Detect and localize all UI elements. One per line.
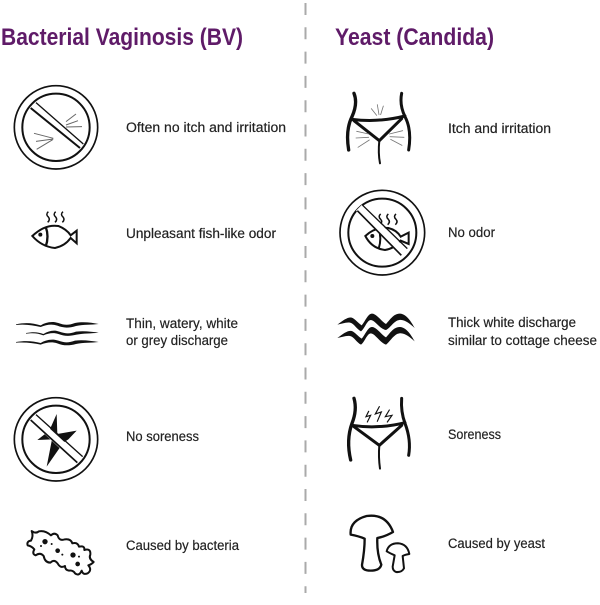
text: thin discharge: or grey discharge (126, 333, 228, 348)
icon: soreness body (349, 398, 409, 469)
icon: no itch (14, 86, 98, 169)
icon: fish odor (32, 212, 77, 248)
icon: no soreness (14, 398, 98, 481)
icon: thick discharge (337, 314, 415, 345)
text: thick discharge: similar to cottage cheese (448, 333, 597, 348)
heading: Bacterial Vaginosis: Bacterial Vaginosis (BV) (1, 24, 243, 51)
text: no soreness: No soreness (126, 429, 199, 444)
text: soreness: Soreness (448, 427, 501, 442)
text: thin discharge (126, 316, 238, 348)
text: no odor: No odor (448, 225, 495, 240)
text: thick discharge: Thick white discharge (448, 315, 576, 330)
text: thin discharge: Thin, watery, white (126, 316, 238, 331)
icon: mushrooms (351, 516, 409, 572)
text: bacteria: Caused by bacteria (126, 538, 239, 553)
text: thick discharge (448, 315, 597, 348)
text: yeast: Caused by yeast (448, 536, 545, 551)
icon: bacteria (27, 531, 94, 575)
text: itch: Itch and irritation (448, 121, 551, 136)
icon: thin discharge (16, 322, 99, 345)
icon: no odor (340, 190, 425, 275)
text: fish odor: Unpleasant fish-like odor (126, 226, 276, 241)
text: no itch: Often no itch and irritation (126, 120, 286, 135)
icon: itching body (348, 93, 410, 163)
heading: Yeast: Yeast (Candida) (335, 24, 494, 51)
